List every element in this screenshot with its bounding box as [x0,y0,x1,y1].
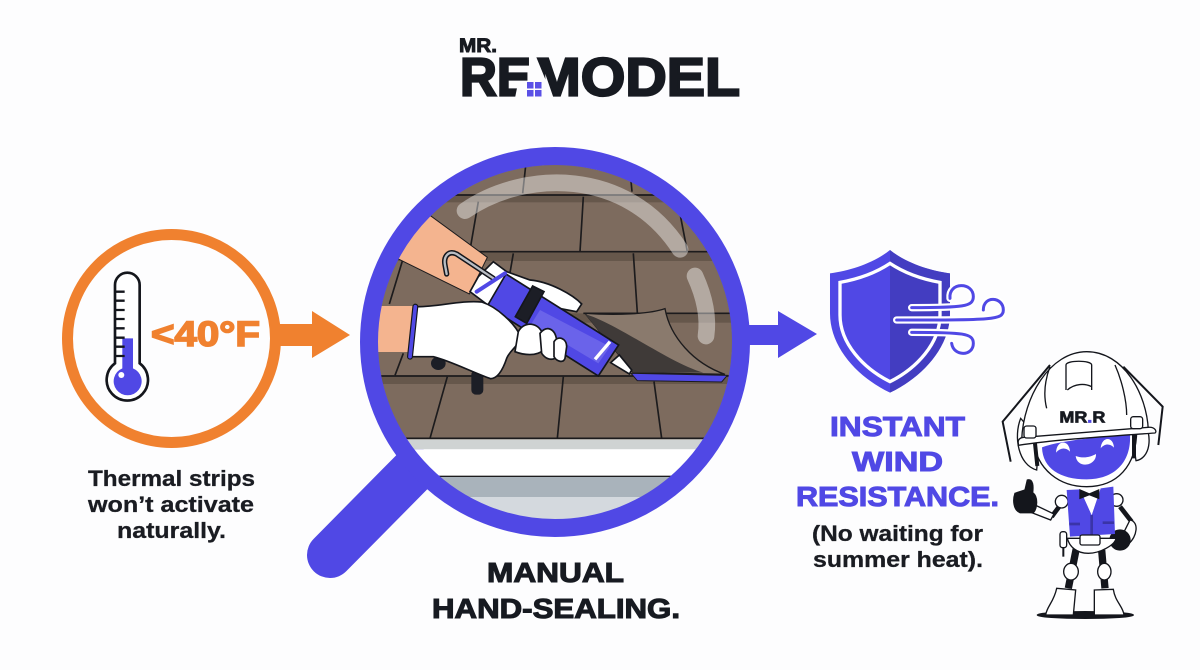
logo: Mr. Remodel [459,36,740,108]
gripping fingers [515,324,567,361]
heading: instant wind resistance: INSTANT [830,411,965,442]
legs [1068,547,1105,588]
heading: manual hand-sealing: MANUAL [487,557,624,588]
heading: manual hand-sealing: HAND-SEALING. [432,593,680,624]
logo: Mr. Remodel: MODEL [533,48,740,108]
belt drill [1060,547,1066,557]
caulk gun trigger [431,357,483,395]
icon: thermometer [107,273,148,401]
heading: manual hand-sealing [432,557,680,624]
arms [1052,503,1062,517]
logo: Mr. Remodel: RE [460,48,531,108]
icon: shield with wind [830,250,1003,393]
sealant bead [631,373,727,382]
hard hat [1022,352,1148,440]
magnifier ring [369,156,741,528]
text: no waiting caption: summer heat). [813,547,983,572]
mascot: Mr. R robot [1003,352,1163,618]
lens glare [465,183,707,336]
heading: instant wind resistance [796,411,999,512]
head [1033,430,1137,487]
bow tie [1080,490,1099,498]
logo: Mr. Remodel: MR. [459,36,497,57]
magnifier handle [330,470,414,555]
caulk gun rod [445,253,493,278]
arrow: blue [745,311,817,358]
caulk gun tube [487,274,632,376]
fist with thumb [1110,530,1130,550]
heading: instant wind resistance: WIND [852,446,943,477]
face screen [1042,434,1130,479]
helmet label: MR.R [1059,410,1105,427]
front glove [410,302,521,379]
text: no waiting caption: (No waiting for [812,521,983,546]
text: thermal strips caption: Thermal strips [88,466,255,491]
magnifying glass with hand-sealing scene [330,156,743,555]
text: thermal strips caption: won’t activate [87,492,254,517]
hat brim [1018,427,1156,445]
text: no waiting caption [812,521,983,572]
ear muffs and straps [1003,365,1050,462]
temperature label: <40°F [151,315,260,354]
boots [1046,588,1076,615]
upper forearm [395,212,487,294]
tool belt [1067,538,1116,553]
ear cup bands [1035,435,1134,466]
text: thermal strips caption [87,466,255,543]
arrow: orange [279,311,350,358]
orange temperature ring [68,234,276,442]
text: thermal strips caption: naturally. [117,518,226,543]
panel: cold temperature [68,234,276,442]
lifted shingle [585,309,725,374]
rear glove [470,262,582,317]
eyes and smile [1056,439,1114,465]
lens scene [370,157,743,524]
heading: instant wind resistance: RESISTANCE. [796,481,999,512]
vest [1067,487,1115,537]
ground shadow [1037,612,1133,618]
lower forearm [378,306,412,352]
